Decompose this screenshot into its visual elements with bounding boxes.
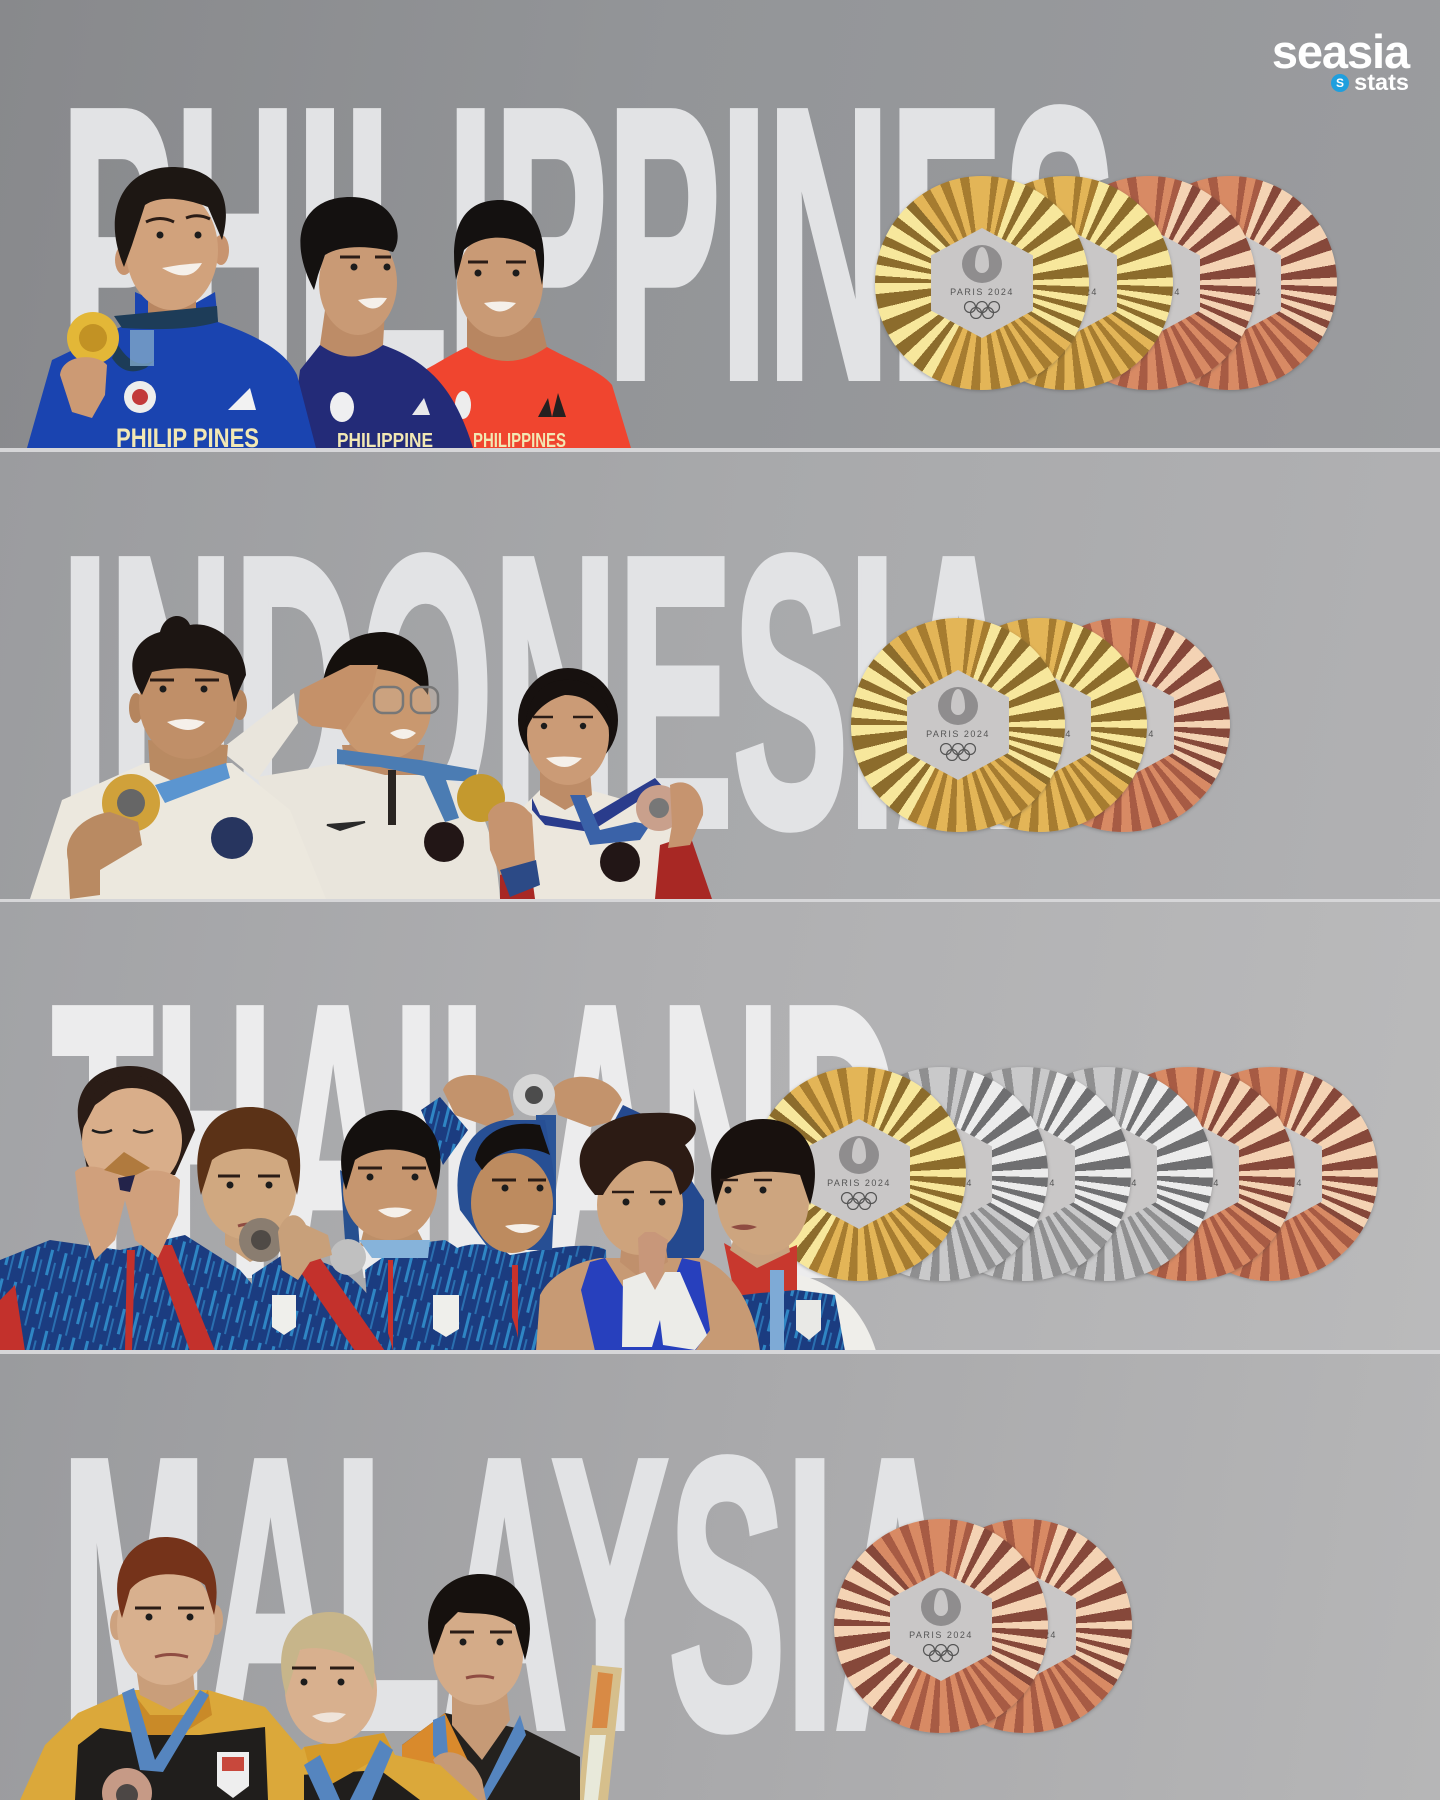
medal row: 1 gold, 3 silver, 2 bronze: PARIS 2024 bbox=[1074, 1178, 1138, 1188]
icon: blue circle bbox=[1331, 74, 1349, 92]
racket held upright bbox=[578, 1665, 622, 1800]
medal row: 2 bronze: PARIS 2024 bbox=[993, 1630, 1057, 1640]
athlete in navy shirt bbox=[290, 197, 473, 452]
athlete: man with reddish hair and bronze medal bbox=[20, 1537, 304, 1800]
logo: seasia stats bbox=[1272, 25, 1410, 95]
medal row: 1 gold, 3 silver, 2 bronze: PARIS 2024 bbox=[1239, 1178, 1303, 1188]
medal row: 1 gold, 3 silver, 2 bronze: PARIS 2024 bbox=[1156, 1178, 1220, 1188]
athlete: man with gold medal bbox=[30, 616, 326, 899]
medal row: 1 gold, 3 silver, 2 bronze bbox=[766, 1066, 1380, 1284]
athletes: Thailand bbox=[0, 1066, 876, 1350]
medal row: 2 gold, 1 bronze: PARIS 2024 bbox=[926, 729, 990, 739]
medal row: 2 bronze bbox=[832, 1518, 1134, 1736]
athletes: Malaysia bbox=[20, 1537, 622, 1800]
medal row: 1 gold, 3 silver, 2 bronze: PARIS 2024 bbox=[909, 1178, 973, 1188]
athlete: man at right bbox=[402, 1574, 580, 1800]
icon: blue circle: S bbox=[1336, 76, 1344, 90]
medal row: 2 bronze: PARIS 2024 bbox=[909, 1630, 973, 1640]
medal row: 2 gold, 2 bronze: PARIS 2024 bbox=[1034, 287, 1098, 297]
panel: Philippines bbox=[0, 0, 1440, 448]
athletes: Indonesia bbox=[30, 616, 712, 899]
athletes: Philippines bbox=[27, 167, 631, 448]
athlete: boxer in blue top with wrapped hands bbox=[536, 1113, 760, 1351]
athlete: woman with medal bbox=[490, 668, 712, 899]
athlete: woman at right in blue jacket bbox=[711, 1119, 876, 1351]
medal row: 2 gold, 2 bronze: PARIS 2024 bbox=[950, 287, 1014, 297]
medal row: 2 gold, 2 bronze: PARIS 2024 bbox=[1198, 287, 1262, 297]
medal row: 2 gold, 2 bronze bbox=[873, 176, 1338, 392]
medal row: 2 gold, 1 bronze: PARIS 2024 bbox=[1091, 729, 1155, 739]
wordmark: stats: stats bbox=[1354, 69, 1409, 95]
athlete: man with brown hair bbox=[197, 1107, 393, 1351]
panel: Indonesia bbox=[0, 452, 1440, 899]
athlete: raised medal pose with blue hood bbox=[421, 1074, 704, 1351]
medal row: 2 gold, 2 bronze: PARIS 2024 bbox=[1117, 287, 1181, 297]
athlete: man with blond hair bbox=[261, 1612, 478, 1800]
medal row: 2 gold, 1 bronze: PARIS 2024 bbox=[1008, 729, 1072, 739]
wordmark: seasia: seasia bbox=[1272, 25, 1409, 78]
panel: Malaysia bbox=[0, 1354, 1440, 1800]
medal row: 1 gold, 3 silver, 2 bronze: PARIS 2024 bbox=[827, 1178, 891, 1188]
athlete: woman kissing medal bbox=[0, 1066, 270, 1351]
athlete in blue jacket holding gold medal bbox=[27, 167, 316, 453]
athlete: man saluting with gold medal bbox=[220, 632, 540, 899]
panel: Thailand bbox=[0, 902, 1440, 1350]
athlete: man with lanyard bbox=[340, 1110, 520, 1351]
medal row: 1 gold, 3 silver, 2 bronze: PARIS 2024 bbox=[992, 1178, 1056, 1188]
medal row: 2 gold, 1 bronze bbox=[850, 617, 1232, 834]
athlete in red shirt bbox=[421, 200, 631, 452]
